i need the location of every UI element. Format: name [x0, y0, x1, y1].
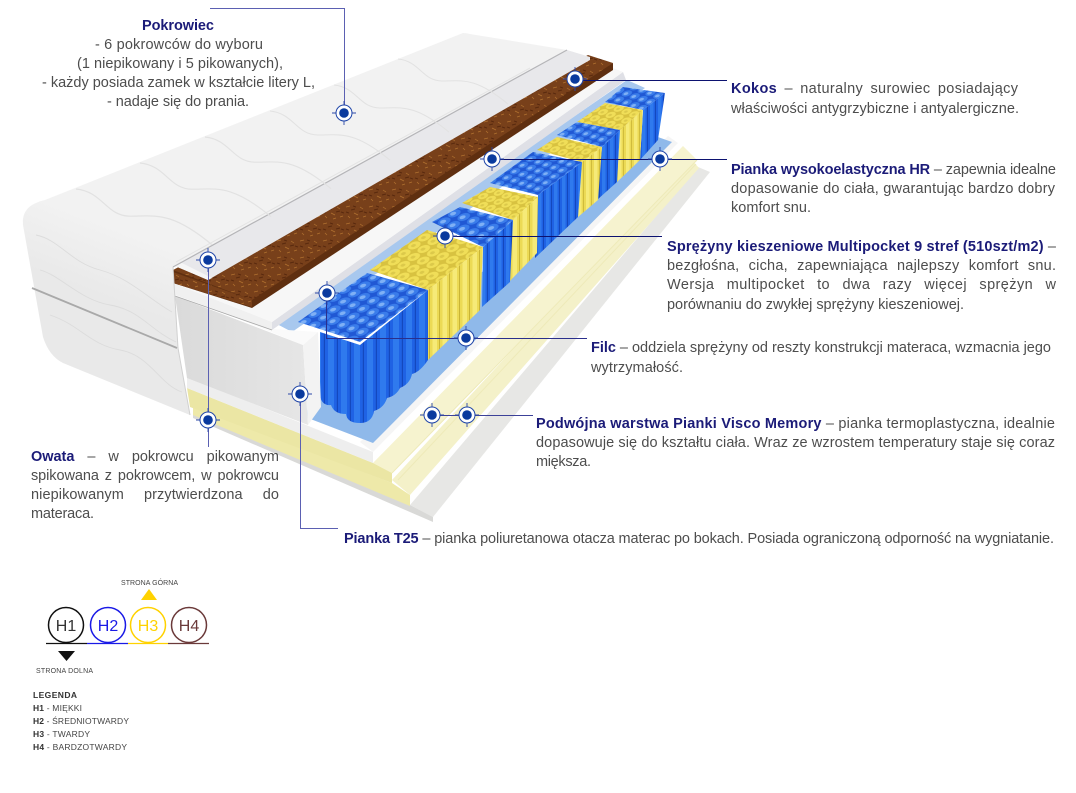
H2 circle — [90, 608, 126, 642]
H1 circle: H1 — [56, 618, 76, 635]
label: bottom side: STRONA DOLNA — [36, 668, 93, 675]
text: Visco: Podwójna warstwa Pianki Visco Memory – pianka termoplastyczna, idealnie — [536, 416, 1055, 432]
text: Pokrowiec: Pokrowiec — [142, 18, 214, 34]
text: Sprężyny — [667, 239, 1057, 313]
text: Owata — [31, 449, 279, 522]
leader: visco — [432, 414, 533, 416]
mattress cover — [23, 33, 567, 415]
layer: visco memory foam — [187, 146, 699, 506]
icon: target T25 — [288, 382, 312, 406]
text: Pianka HR: dopasowanie do ciała, gwarantując bardzo dobry — [731, 181, 1056, 197]
text: Sprężyny: bezgłośna, cicha, zapewniająca najlepszy komfort snu. — [667, 258, 1056, 274]
icon: black triangle — [58, 651, 75, 661]
spring block 4 yellow — [577, 103, 643, 182]
icon: target springs — [433, 224, 457, 248]
spring block 1 blue — [298, 273, 428, 423]
text: Pianka T25: Pianka T25 – pianka poliuretanowa otacza materac po bokach. Posiada ograniczoną odporność na wygniatanie. — [344, 531, 1054, 547]
icon: target wadding bottom — [196, 408, 220, 432]
spring block 2 blue — [432, 207, 513, 307]
legend: H2 - ŚREDNIOTWARDY — [33, 715, 129, 726]
icon: target wadding top — [196, 248, 220, 272]
legend: H3 - TWARDY — [33, 729, 90, 739]
layer: felt upper — [275, 80, 645, 332]
legend: LEGENDA — [33, 690, 77, 700]
text: Sprężyny: Sprężyny kieszeniowe Multipocket 9 stref (510szt/m2) – — [667, 239, 1057, 255]
icon: target coconut — [563, 67, 587, 91]
text: Owata: materaca. — [31, 506, 94, 522]
text: Pianka HR — [731, 162, 1056, 216]
text: Owata: niepikowanym przytwierdzona do — [31, 487, 279, 503]
layer: top white strip — [175, 50, 590, 280]
text: Filc: wytrzymałość. — [590, 360, 683, 376]
cover seam — [32, 288, 177, 348]
leader: HR foam — [491, 158, 727, 160]
text: Visco: miększa. — [536, 454, 591, 470]
H4 circle — [172, 608, 206, 642]
text: Sprężyny: Wersja multipocket to dwa razy więcej sprężyn w — [667, 277, 1057, 293]
label: top side: STRONA GÓRNA — [121, 578, 178, 587]
icon: target visco left — [420, 403, 444, 427]
leader: T25 — [300, 394, 338, 528]
leader: felt — [326, 292, 587, 338]
legend: H4 - BARDZOTWARDY — [33, 742, 127, 752]
H1 circle — [48, 608, 84, 642]
icon: target cover — [332, 101, 356, 125]
mattress cross-section illustration — [23, 33, 710, 522]
leader: wadding — [208, 260, 210, 447]
text: Pokrowiec — [42, 18, 315, 110]
text: Kokos — [730, 81, 1019, 117]
icon: yellow triangle — [141, 589, 157, 600]
spring block 1 yellow — [370, 230, 483, 360]
icon: target HR left — [480, 147, 504, 171]
icon: target felt upper — [315, 281, 339, 305]
icon: target felt lower — [454, 326, 478, 350]
layer: coconut — [173, 55, 613, 308]
H2 circle: H2 — [98, 618, 118, 635]
text: Filc: Filc – oddziela sprężyny od reszty konstrukcji materaca, wzmacnia jego — [591, 340, 1051, 356]
leader: springs — [445, 236, 662, 238]
pocket springs — [298, 87, 665, 423]
legend — [33, 690, 129, 752]
spring block 2 yellow — [462, 187, 538, 283]
H4 circle: H4 — [179, 618, 199, 635]
text: Pianka HR: Pianka wysokoelastyczna HR – zapewnia idealne — [731, 162, 1056, 178]
icon: target HR right — [648, 147, 672, 171]
text: Kokos: Kokos – naturalny surowiec posiadający — [731, 81, 1019, 97]
layer: polyurethane T25 foam block — [175, 293, 321, 425]
text: Pokrowiec: - nadaje się do prania. — [107, 94, 249, 110]
text: Pokrowiec: - każdy posiada zamek w kształcie litery L, — [42, 75, 315, 91]
text: Pianka HR: komfort snu. — [731, 200, 811, 216]
icon: target visco right — [455, 403, 479, 427]
base layer — [193, 167, 710, 522]
layer: felt lower — [300, 136, 672, 443]
spring block 4b blue — [557, 122, 620, 200]
text: Owata: Owata – w pokrowcu pikowanym — [31, 449, 279, 465]
spring block 3 blue — [490, 152, 582, 258]
H3 circle: H3 — [138, 618, 158, 635]
layer: high elastic HR foam — [173, 68, 626, 330]
spring block 5 blue — [605, 87, 665, 160]
text: Pokrowiec: (1 niepikowany i 5 pikowanych), — [77, 56, 283, 72]
H3 circle — [130, 608, 166, 642]
legend: H1 - MIĘKKI — [33, 703, 82, 713]
text: Pokrowiec: - 6 pokrowców do wyboru — [95, 37, 263, 53]
text: Visco — [536, 416, 1055, 470]
firmness scale — [36, 578, 209, 675]
text: Owata: spikowana z pokrowcem, w pokrowcu — [31, 468, 279, 484]
leader: coconut — [575, 80, 727, 82]
text: Visco: dopasowuje się do kształtu ciała. Wraz ze wzrostem temperatury staje się coraz — [536, 435, 1055, 451]
text: Kokos: właściwości antygrzybiczne i antyalergiczne. — [730, 101, 1019, 117]
spring block 3 yellow — [537, 137, 602, 217]
text: Filc — [590, 340, 1051, 376]
layer: white support foam — [187, 136, 678, 463]
text: Sprężyny: porównaniu do zwykłej sprężyny kieszeniowej. — [667, 297, 964, 313]
leader: cover — [210, 8, 344, 113]
